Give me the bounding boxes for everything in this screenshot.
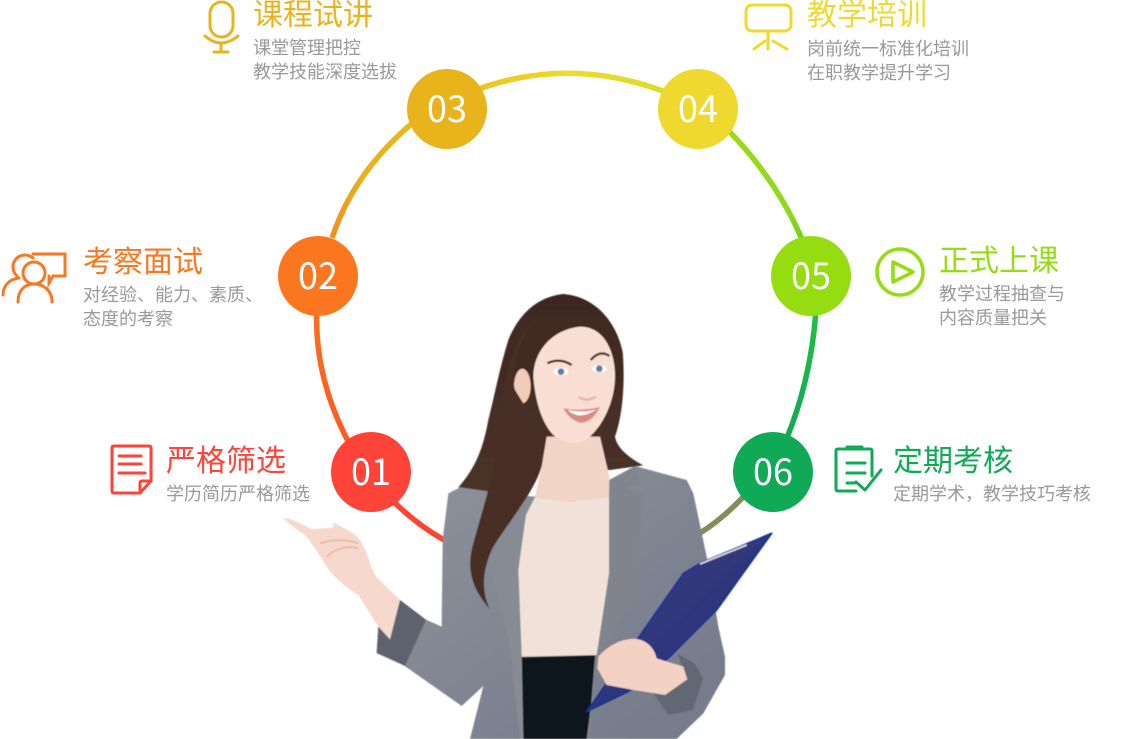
left lapel [490,510,527,739]
finger creases [320,540,358,557]
back hair [458,294,643,609]
heading: 考察面试 [83,246,203,279]
panel: step 01 screening [112,445,310,504]
step 06 node [733,432,813,512]
icon: play button [877,249,923,295]
icon: document [112,446,151,493]
step 01 node: 01 [351,444,391,496]
step 03 node [407,69,487,149]
step 01 node [331,432,411,512]
description: 课堂管理把控 [253,38,361,58]
ear [514,369,531,403]
description: 教学技能深度选拔 [253,62,397,82]
eyebrows [547,353,609,365]
description: 教学过程抽查与 [939,284,1065,304]
heading: 正式上课 [939,245,1059,278]
description: 学历简历严格筛选 [166,484,310,504]
step 02 node [278,236,358,316]
heading: 严格筛选 [166,445,286,478]
eyes [554,365,607,375]
face [533,327,615,443]
panel: step 06 assessment [836,445,1091,504]
step 04 node [658,69,738,149]
description: 对经验、能力、素质、 [83,285,263,305]
clipboard [587,533,772,712]
photo: businesswoman holding clipboard [283,294,772,739]
smile [563,407,600,423]
nose [578,397,596,400]
step 04 node: 04 [678,81,718,133]
blouse [518,497,609,657]
neck and chest [535,437,609,501]
panel: step 02 interview [3,246,263,329]
description: 岗前统一标准化培训 [807,39,969,59]
description: 定期学术，教学技巧考核 [893,484,1091,504]
heading: 定期考核 [893,445,1013,478]
paper edge [700,545,747,564]
ring connecting the six steps [317,73,816,540]
holding hand [597,639,687,695]
description: 在职教学提升学习 [807,63,951,83]
icon: microphone [205,2,238,52]
icon: presentation screen [746,5,791,49]
step 03 node: 03 [427,81,467,133]
step 05 node [771,236,851,316]
jacket lapels [587,466,643,739]
icon: checklist [836,447,881,491]
front hair strand [470,320,542,609]
pointing arm and hand [283,518,400,639]
teeth [568,409,597,415]
description: 内容质量把关 [939,308,1047,328]
jacket [377,466,725,739]
panel: step 05 teaching [877,245,1065,328]
description: 态度的考察 [83,309,173,329]
icon: people with speech bubble [3,254,65,302]
panel: step 03 course trial [205,0,397,82]
step 02 node: 02 [298,248,338,300]
panel: step 04 training [746,0,969,83]
step 05 node: 05 [791,248,831,300]
skirt [522,655,595,739]
step 06 node: 06 [753,444,793,496]
sleeve cuff right [653,653,703,715]
sleeve cuff left [377,600,426,666]
